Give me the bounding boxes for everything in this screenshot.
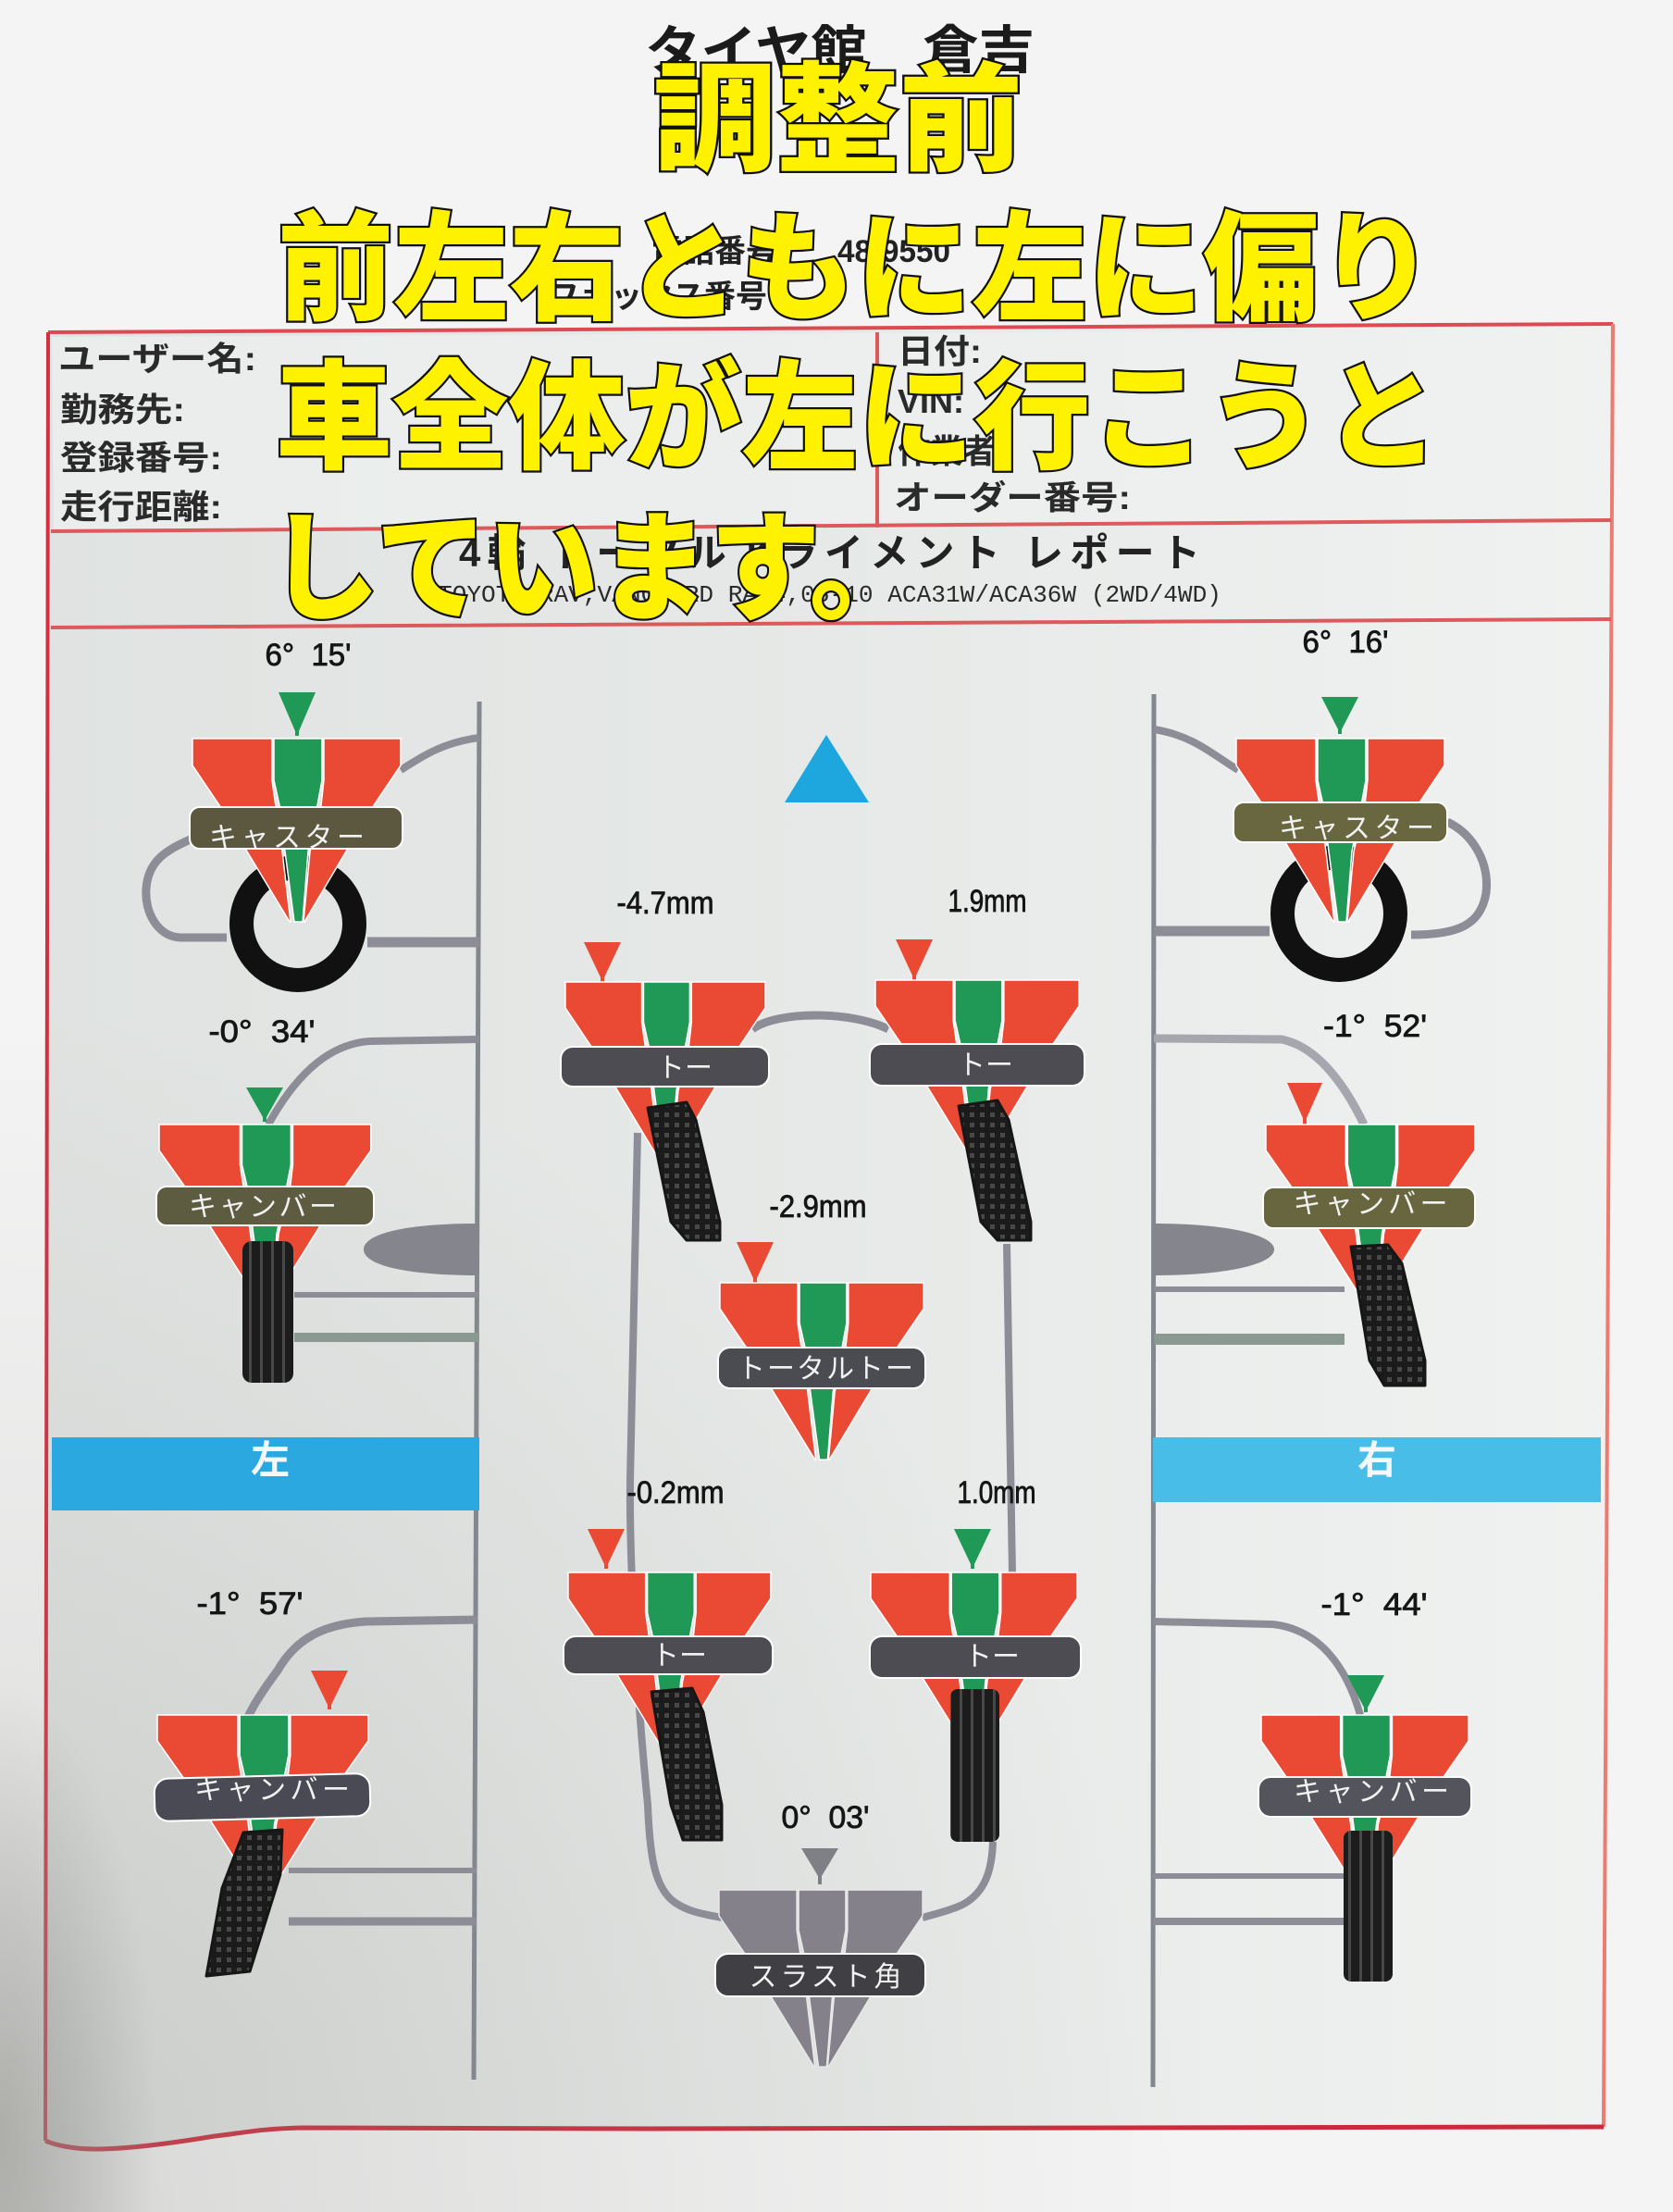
side band: left: 左	[251, 1438, 290, 1482]
order info labels: オーダー番号:	[894, 478, 1131, 516]
label: total toe: トータルトー	[737, 1354, 913, 1385]
side band: right: 右	[1357, 1438, 1396, 1482]
paper shading	[0, 1009, 1673, 2212]
icon: tire tilted	[1351, 1245, 1425, 1386]
report title: TOYOTA RAV,VANGUARD RAV4,05-10 ACA31W/ACA36W (2WD/4WD)	[438, 581, 1221, 609]
label: caster left: キャスター	[209, 823, 365, 853]
gauge: right caster	[1233, 625, 1447, 970]
order info labels: 作業者:	[898, 432, 1007, 470]
report title: 4輪 トータルアライメント レポート	[459, 531, 1200, 575]
central spine lines	[474, 694, 1154, 2087]
heading line: car pulling left: 車全体が左に行こうと	[276, 353, 1440, 485]
car body: front left suspension	[268, 1039, 479, 1337]
gauge: front left camber	[156, 1014, 374, 1383]
icon: tire toe rear right	[950, 1689, 999, 1842]
order info labels: 日付:	[898, 332, 982, 370]
side band: left	[52, 1437, 479, 1510]
heading: yellow overlay message	[268, 55, 1440, 636]
gauge: rear right camber	[1258, 1587, 1471, 1982]
gauge: total toe	[718, 1189, 925, 1460]
icon: tire tilted left	[206, 1830, 282, 1976]
label: toe rear right: トー	[964, 1642, 1020, 1672]
shop header text: 電話番号:	[651, 234, 787, 269]
heading line: front biased left: 前左右ともに左に偏り	[278, 204, 1434, 336]
shop header text	[548, 21, 1035, 315]
order info labels: VIN:	[898, 382, 964, 420]
shop header text: 48-9550	[837, 234, 950, 269]
gauge: left caster	[190, 638, 403, 980]
pointer: front right camber	[1287, 1083, 1322, 1125]
icon: tire toe front right	[959, 1100, 1031, 1240]
value: thrust angle: 0° 03'	[781, 1800, 870, 1835]
value: rear left camber: -1° 57'	[196, 1586, 304, 1622]
pointer: front right toe	[896, 939, 933, 980]
panel: report frame	[45, 324, 1613, 2149]
pointer: thrust angle	[801, 1848, 838, 1884]
label: caster right: キャスター	[1279, 814, 1434, 844]
car body: right caster	[1154, 729, 1487, 935]
value: rear left toe: -0.2mm	[627, 1475, 724, 1510]
gauge: rear right toe	[870, 1475, 1081, 1842]
icon: tire toe front left	[648, 1102, 720, 1240]
order info labels	[894, 332, 1131, 516]
value: rear right camber: -1° 44'	[1321, 1587, 1427, 1622]
value: front left camber: -0° 34'	[209, 1014, 315, 1050]
pointer: front left toe	[584, 942, 621, 982]
customer info labels	[58, 340, 256, 526]
pointer: total toe	[737, 1242, 774, 1283]
gauge: rear left camber	[154, 1586, 371, 1976]
side band: right	[1153, 1437, 1601, 1502]
gauge: rear left toe	[564, 1475, 773, 1840]
car body: left caster	[146, 738, 479, 942]
icon: tire upright	[242, 1241, 293, 1383]
customer info labels: 走行距離:	[60, 488, 222, 526]
label: toe front left: トー	[657, 1053, 713, 1084]
pointer: rear left camber	[311, 1671, 348, 1709]
pointer: left caster	[279, 692, 316, 736]
shop header text: タイヤ館 倉吉	[645, 21, 1035, 80]
pointer: rear right camber	[1347, 1675, 1384, 1712]
customer info labels: 登録番号:	[60, 439, 222, 477]
pointer: front left camber	[246, 1087, 283, 1122]
gauge: front left toe	[561, 886, 769, 1240]
pointer: rear left toe	[588, 1529, 625, 1569]
car body: front right suspension	[1154, 1038, 1364, 1339]
car body: rear left suspension	[248, 1620, 477, 1921]
value: total toe: -2.9mm	[770, 1189, 866, 1224]
label: toe rear left: トー	[651, 1641, 707, 1671]
icon: left tire side view	[242, 867, 354, 980]
label: camber front right: キャンバー	[1294, 1189, 1447, 1220]
pointer: right caster	[1321, 697, 1358, 734]
value: front left toe: -4.7mm	[616, 886, 714, 921]
car body: rear right suspension	[1153, 1622, 1360, 1921]
report title	[438, 531, 1221, 609]
value: right caster: 6° 16'	[1303, 625, 1388, 660]
label: camber front left: キャンバー	[189, 1192, 337, 1223]
chassis outline	[630, 1015, 1012, 1918]
gauge: front right toe	[870, 884, 1084, 1240]
arrow: vehicle forward direction	[785, 735, 869, 802]
gauge: thrust angle	[715, 1800, 925, 2067]
label: toe front right: トー	[958, 1050, 1013, 1081]
value: rear right toe: 1.0mm	[957, 1475, 1036, 1510]
label: camber rear left: キャンバー	[194, 1775, 350, 1806]
value: left caster: 6° 15'	[265, 638, 352, 673]
heading line: ending: しています。	[268, 503, 921, 636]
customer info labels: 勤務先:	[60, 391, 185, 429]
icon: tire upright rear right	[1344, 1831, 1393, 1982]
heading line: before adjustment: 調整前	[653, 55, 1022, 187]
value: front right camber: -1° 52'	[1323, 1009, 1427, 1044]
shop header text: ファックス番号	[548, 280, 767, 315]
label: thrust angle: スラスト角	[750, 1962, 901, 1993]
label: camber rear right: キャンバー	[1294, 1777, 1449, 1808]
icon: tire toe rear left	[651, 1688, 722, 1840]
pointer: rear right toe	[954, 1529, 991, 1569]
icon: right tire side view	[1283, 857, 1395, 970]
gauge: front right camber	[1263, 1009, 1475, 1386]
customer info labels: ユーザー名:	[58, 340, 256, 378]
value: front right toe: 1.9mm	[948, 884, 1027, 919]
